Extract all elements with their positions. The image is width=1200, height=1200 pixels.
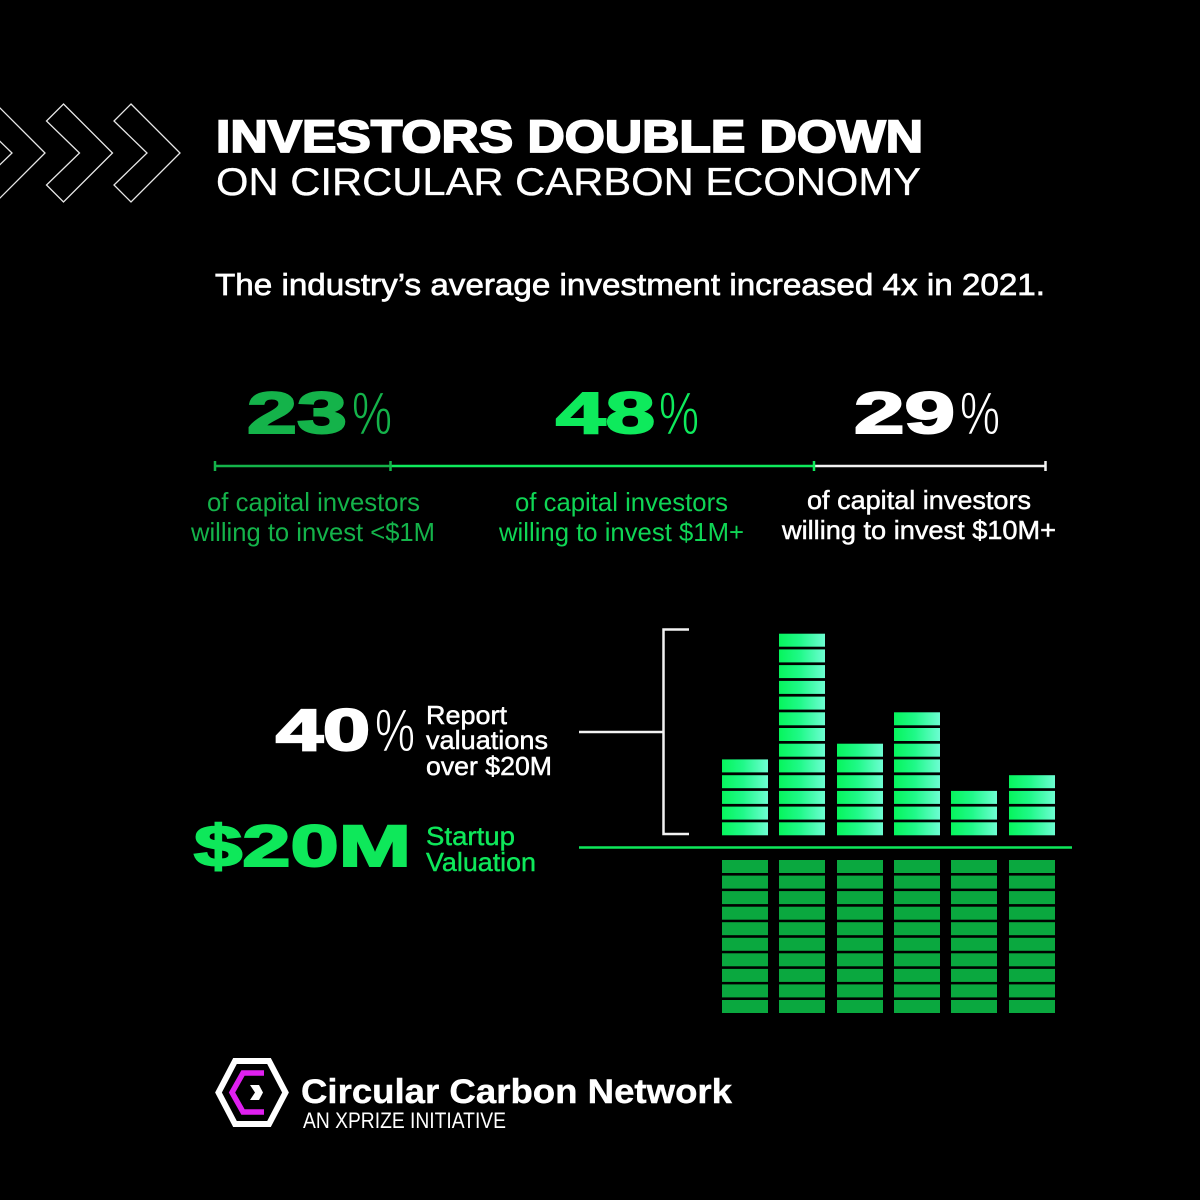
stat: 48% [556,380,699,447]
title: ON CIRCULAR CARBON ECONOMY [216,161,921,204]
stat: $20M startup valuation: Startup [426,821,515,851]
bar chart: valuations below $20M [722,860,1055,1013]
icon: chevron arrows [0,104,180,202]
range scale line [215,461,1046,471]
stat: 48%: % [659,380,699,447]
caption: under $1M: of capital investors [207,487,420,517]
stat: $20M startup valuation [194,814,536,879]
stat: 40% report valuations: over $20M [426,751,552,781]
stat: 40% report valuations: valuations [426,725,548,755]
bracket: top valuations [579,630,689,834]
stat: 29%: 29 [854,381,955,446]
subheading: The industry’s average investment increased 4x in 2021. [215,267,1045,302]
stat: $20M startup valuation: Valuation [426,847,536,877]
caption: $10M+: willing to invest $10M+ [781,515,1056,545]
caption: $10M+: of capital investors [807,485,1031,515]
stat: 40% report valuations [276,697,552,781]
stat: 40% report valuations: 40 [276,698,370,763]
stat: 29% [854,380,1000,447]
stat: 23%: 23 [247,381,347,446]
caption: $10M+ [781,485,1056,545]
stat: 40% report valuations: Report [426,700,508,730]
title: INVESTORS DOUBLE DOWN [216,111,923,162]
stat: 48%: 48 [556,381,655,446]
icon: Circular Carbon Network logo [218,1061,286,1124]
logo wordmark [301,1073,732,1133]
bar chart: valuations above $20M [722,634,1055,835]
logo wordmark: AN XPRIZE INITIATIVE [303,1108,506,1133]
stat: 23%: % [352,380,392,447]
valuation threshold line [579,846,1072,849]
logo wordmark: Circular Carbon Network [301,1073,732,1111]
stat: $20M startup valuation: $20M [194,814,411,879]
caption: under $1M: willing to invest <$1M [190,517,435,547]
stat: 29%: % [960,380,1000,447]
caption: $1M+: willing to invest $1M+ [498,517,744,547]
stat: 23% [247,380,392,447]
caption: under $1M [190,487,435,547]
caption: $1M+ [498,487,744,547]
title [216,111,923,204]
caption: $1M+: of capital investors [515,487,728,517]
stat: 40% report valuations: % [375,697,415,764]
